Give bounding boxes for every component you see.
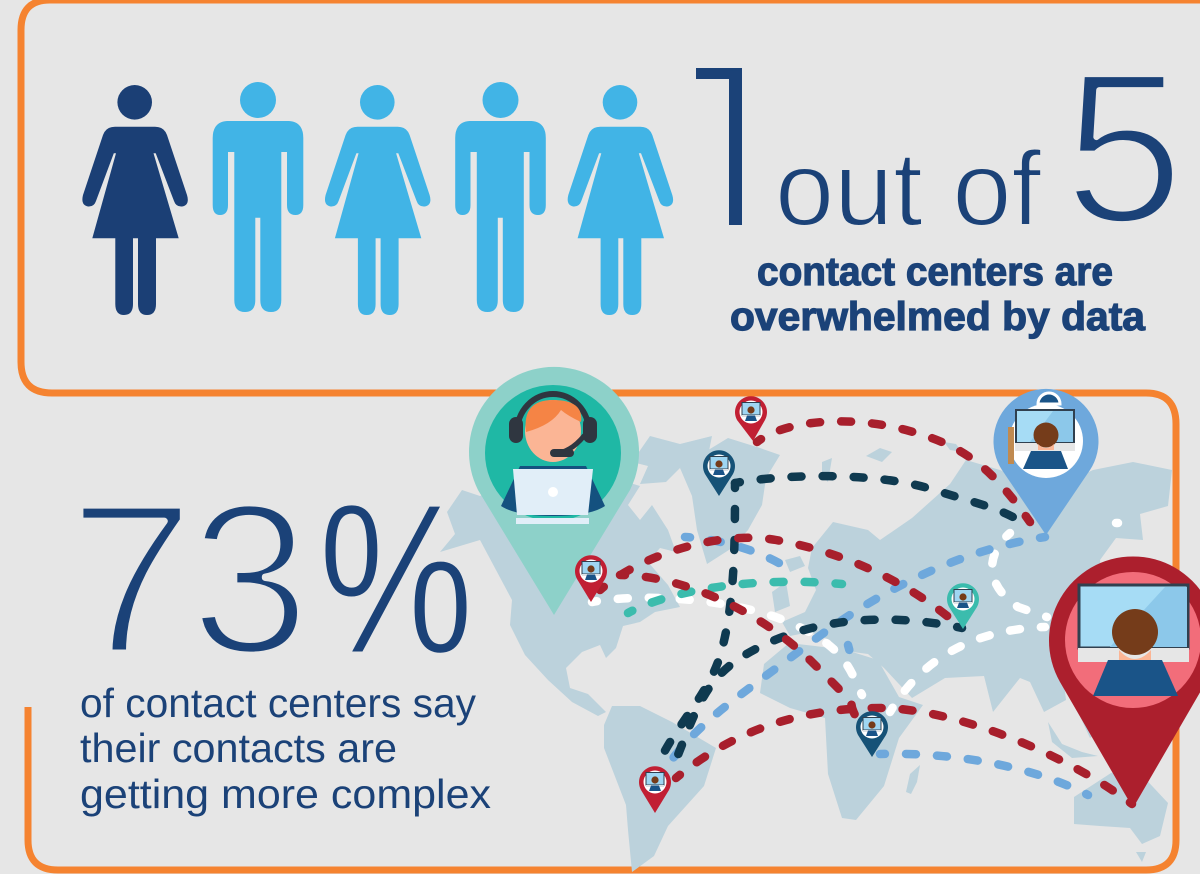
Canadian Arctic islands xyxy=(632,436,712,484)
text block: contacts more complex: getting more complex xyxy=(80,771,492,817)
pin: small teal Asia xyxy=(947,583,979,629)
headline: 73% xyxy=(68,458,474,699)
route lines xyxy=(592,421,1132,804)
route: white lines xyxy=(592,523,1118,712)
icon: man 2 xyxy=(455,82,546,312)
big figure: 1 out of 5: out of xyxy=(775,130,1042,248)
headline: 73%: 3 xyxy=(190,458,310,699)
icon: people row with one of five highlighted xyxy=(82,82,673,315)
big figure: 1 out of 5: 5 xyxy=(1064,27,1184,268)
route: teal line xyxy=(628,582,842,613)
Africa xyxy=(760,643,923,820)
pin: small red north xyxy=(735,396,767,441)
pin: small navy Africa xyxy=(856,711,888,757)
British Isles xyxy=(772,582,790,612)
caption: contact centers are overwhelmed by data: overwhelmed by data xyxy=(730,295,1146,339)
icon: man 1 xyxy=(213,82,303,312)
pin: light blue with monitor user xyxy=(994,389,1098,535)
big figure: 1 out of 5: 1 xyxy=(668,23,793,273)
pin: large red with monitor user xyxy=(1049,556,1200,808)
Iceland xyxy=(785,556,805,572)
pin: small red North America xyxy=(575,555,607,602)
Eurasia xyxy=(782,460,1172,712)
Indonesia xyxy=(1048,705,1112,758)
pin: small red South America xyxy=(639,766,671,813)
Greenland xyxy=(680,438,780,564)
route: light blue lines xyxy=(668,537,1088,795)
Australia xyxy=(1074,770,1168,844)
world map xyxy=(440,436,1172,872)
Central and South America xyxy=(604,706,716,872)
text block: contacts more complex: their contacts are xyxy=(80,725,397,771)
pin: small navy Greenland xyxy=(703,450,735,496)
Tasmania xyxy=(1136,852,1146,862)
big figure: 1 out of 5 xyxy=(696,68,1172,225)
icon: woman 2 xyxy=(325,85,430,315)
North America xyxy=(440,470,680,716)
text block: contacts more complex: of contact centers say xyxy=(80,680,476,726)
text block: contacts more complex xyxy=(80,680,492,817)
icon: highlighted woman xyxy=(82,85,188,315)
route: navy lines xyxy=(660,476,1025,770)
caption: contact centers are overwhelmed by data: contact centers are xyxy=(757,250,1113,294)
headline: 73%: % xyxy=(318,458,474,699)
Arctic islands xyxy=(822,442,962,482)
Madagascar xyxy=(906,765,920,794)
pin: agent with headset xyxy=(469,367,639,615)
caption: contact centers are overwhelmed by data xyxy=(730,250,1146,339)
icon: woman 3 xyxy=(568,85,673,315)
headline: 73%: 7 xyxy=(68,458,195,699)
route: red lines xyxy=(600,421,1132,804)
panel: 1 out of 5 xyxy=(82,68,1172,340)
